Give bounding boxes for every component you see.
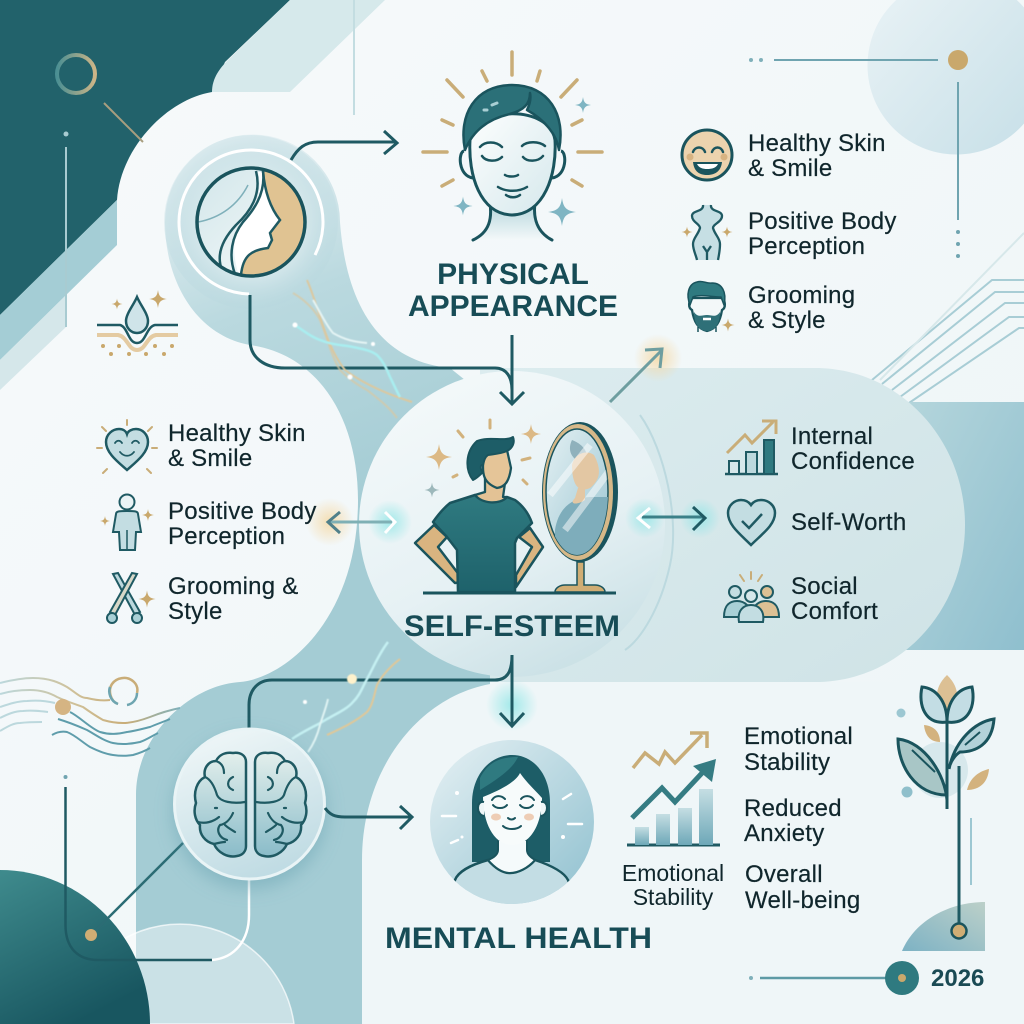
illustration: man and mirror	[415, 420, 618, 593]
timeline marker	[749, 961, 919, 995]
halo	[164, 135, 338, 309]
eyes and mouth	[480, 142, 545, 197]
ground line	[423, 592, 616, 594]
text: chart label: Stability	[633, 884, 714, 910]
arrow: brain to mental health	[325, 806, 412, 829]
text: year: 2026	[931, 965, 984, 992]
head profile medallion	[198, 170, 304, 274]
text: reduced anxiety: Reduced	[744, 795, 842, 822]
text: reduced anxiety: Anxiety	[744, 820, 824, 847]
head	[483, 450, 511, 488]
icon: social group	[724, 572, 779, 622]
text: social comfort: Comfort	[791, 598, 878, 625]
mirror reflection	[550, 440, 610, 560]
teal connecting blob	[136, 134, 490, 1024]
arrow: self-esteem to mental health	[486, 655, 538, 731]
brain right lobe	[255, 753, 306, 856]
top right circle	[867, 0, 1024, 155]
chart: rising arrows and bars	[627, 733, 720, 845]
text: healthy skin left: Healthy Skin	[168, 420, 306, 447]
text: healthy skin and smile: Healthy Skin	[748, 130, 886, 157]
icon: brain circle	[174, 729, 324, 879]
calm marks	[442, 794, 582, 843]
icon: bearded man	[688, 281, 734, 332]
text: self-worth: Self-Worth	[791, 509, 906, 536]
arrow: diagonal with glow	[610, 334, 682, 402]
arrow: self-esteem branch to brain	[249, 655, 512, 729]
hair	[463, 85, 561, 150]
heading: self-esteem: SELF-ESTEEM	[404, 610, 620, 643]
hair crown tint	[480, 757, 518, 790]
decorative gold line	[104, 103, 143, 142]
icon: scissors	[107, 573, 156, 623]
icon: physical appearance face	[423, 52, 602, 240]
heading: mental health: MENTAL HEALTH	[385, 922, 652, 955]
ears	[460, 151, 565, 178]
bottom left connector lines	[64, 775, 249, 960]
sparkles and rays	[426, 444, 452, 470]
decorative waves left	[0, 678, 180, 756]
hair	[467, 437, 514, 480]
decorative ring on dark shape	[57, 55, 95, 93]
text: emotional stability: Emotional	[744, 723, 853, 750]
icon: skin with water drop	[97, 290, 178, 356]
face features	[492, 796, 534, 829]
center circle: self-esteem	[359, 371, 665, 677]
text: grooming left: Style	[168, 598, 223, 625]
hair highlight	[484, 103, 497, 110]
arrow: physical appearance to self-esteem	[500, 335, 524, 404]
arrow: profile to physical appearance	[291, 131, 397, 160]
panel: mental health	[362, 682, 1024, 1024]
background: dark teal corner shape	[0, 0, 290, 315]
text: positive body left: Perception	[168, 523, 285, 550]
text: healthy skin left: & Smile	[168, 445, 252, 472]
icon: rising chart confidence	[725, 421, 778, 474]
arrow: right double arrow with glow	[625, 498, 720, 538]
icon: woman portrait	[430, 740, 594, 910]
icon: plant	[896, 675, 994, 809]
icon: person	[100, 494, 154, 550]
hair back	[472, 755, 550, 862]
shoulders	[454, 859, 570, 904]
top right connector line with gold dot	[749, 50, 968, 258]
mirror stand	[555, 562, 605, 592]
panel: self-esteem right outcomes	[480, 368, 965, 682]
right teal band	[900, 402, 1024, 650]
arms	[415, 525, 477, 583]
neck	[473, 203, 552, 240]
heading: physical appearance: APPEARANCE	[408, 290, 618, 323]
faint outer arc	[625, 415, 673, 650]
neck	[488, 840, 535, 873]
light wisps lower	[292, 642, 400, 752]
dark teal circle bottom left	[0, 870, 150, 1024]
text: social comfort: Social	[791, 573, 858, 600]
diagonal line pattern right	[872, 233, 1024, 403]
background: light band top	[212, 0, 385, 92]
sparkles	[454, 196, 472, 216]
mirror frame	[542, 422, 618, 562]
icon: body silhouette	[682, 205, 732, 260]
brain left lobe	[195, 753, 246, 856]
light circle bottom left	[66, 924, 294, 1024]
text: overall well-being: Overall	[745, 861, 823, 888]
background: teal diagonal band	[0, 200, 117, 360]
text: internal confidence: Confidence	[791, 448, 915, 475]
arrow: left double arrow with glow	[306, 498, 412, 546]
text: positive body left: Positive Body	[168, 498, 317, 525]
decorative line at top	[353, 0, 355, 115]
text: emotional stability: Stability	[744, 749, 830, 776]
text: grooming and style: Grooming	[748, 282, 855, 309]
white arc	[179, 150, 323, 294]
icon: heart with check	[728, 500, 775, 545]
face	[470, 114, 555, 215]
text: internal confidence: Internal	[791, 423, 873, 450]
decorative vertical line with dot	[64, 132, 68, 327]
icon: heart with smile	[97, 420, 157, 473]
heading: physical appearance: PHYSICAL	[437, 258, 589, 291]
face	[483, 773, 542, 845]
shirt	[433, 495, 532, 592]
text: positive body perception: Positive Body	[748, 208, 897, 235]
text: positive body perception: Perception	[748, 233, 865, 260]
background: lower fading band	[0, 245, 117, 390]
arrow: profile down to self-esteem	[250, 295, 512, 390]
text: grooming and style: & Style	[748, 307, 826, 334]
text: grooming left: Grooming &	[168, 573, 299, 600]
ears	[478, 802, 547, 816]
text: overall well-being: Well-being	[745, 887, 860, 914]
icon: profile circle group	[164, 135, 332, 296]
light wisps upper	[292, 280, 412, 418]
neck	[475, 478, 507, 502]
icon: smiling face	[682, 130, 732, 180]
rays	[423, 52, 602, 186]
text: healthy skin and smile: & Smile	[748, 155, 832, 182]
text: chart label: Emotional	[622, 860, 724, 886]
mound with connector	[902, 766, 985, 951]
